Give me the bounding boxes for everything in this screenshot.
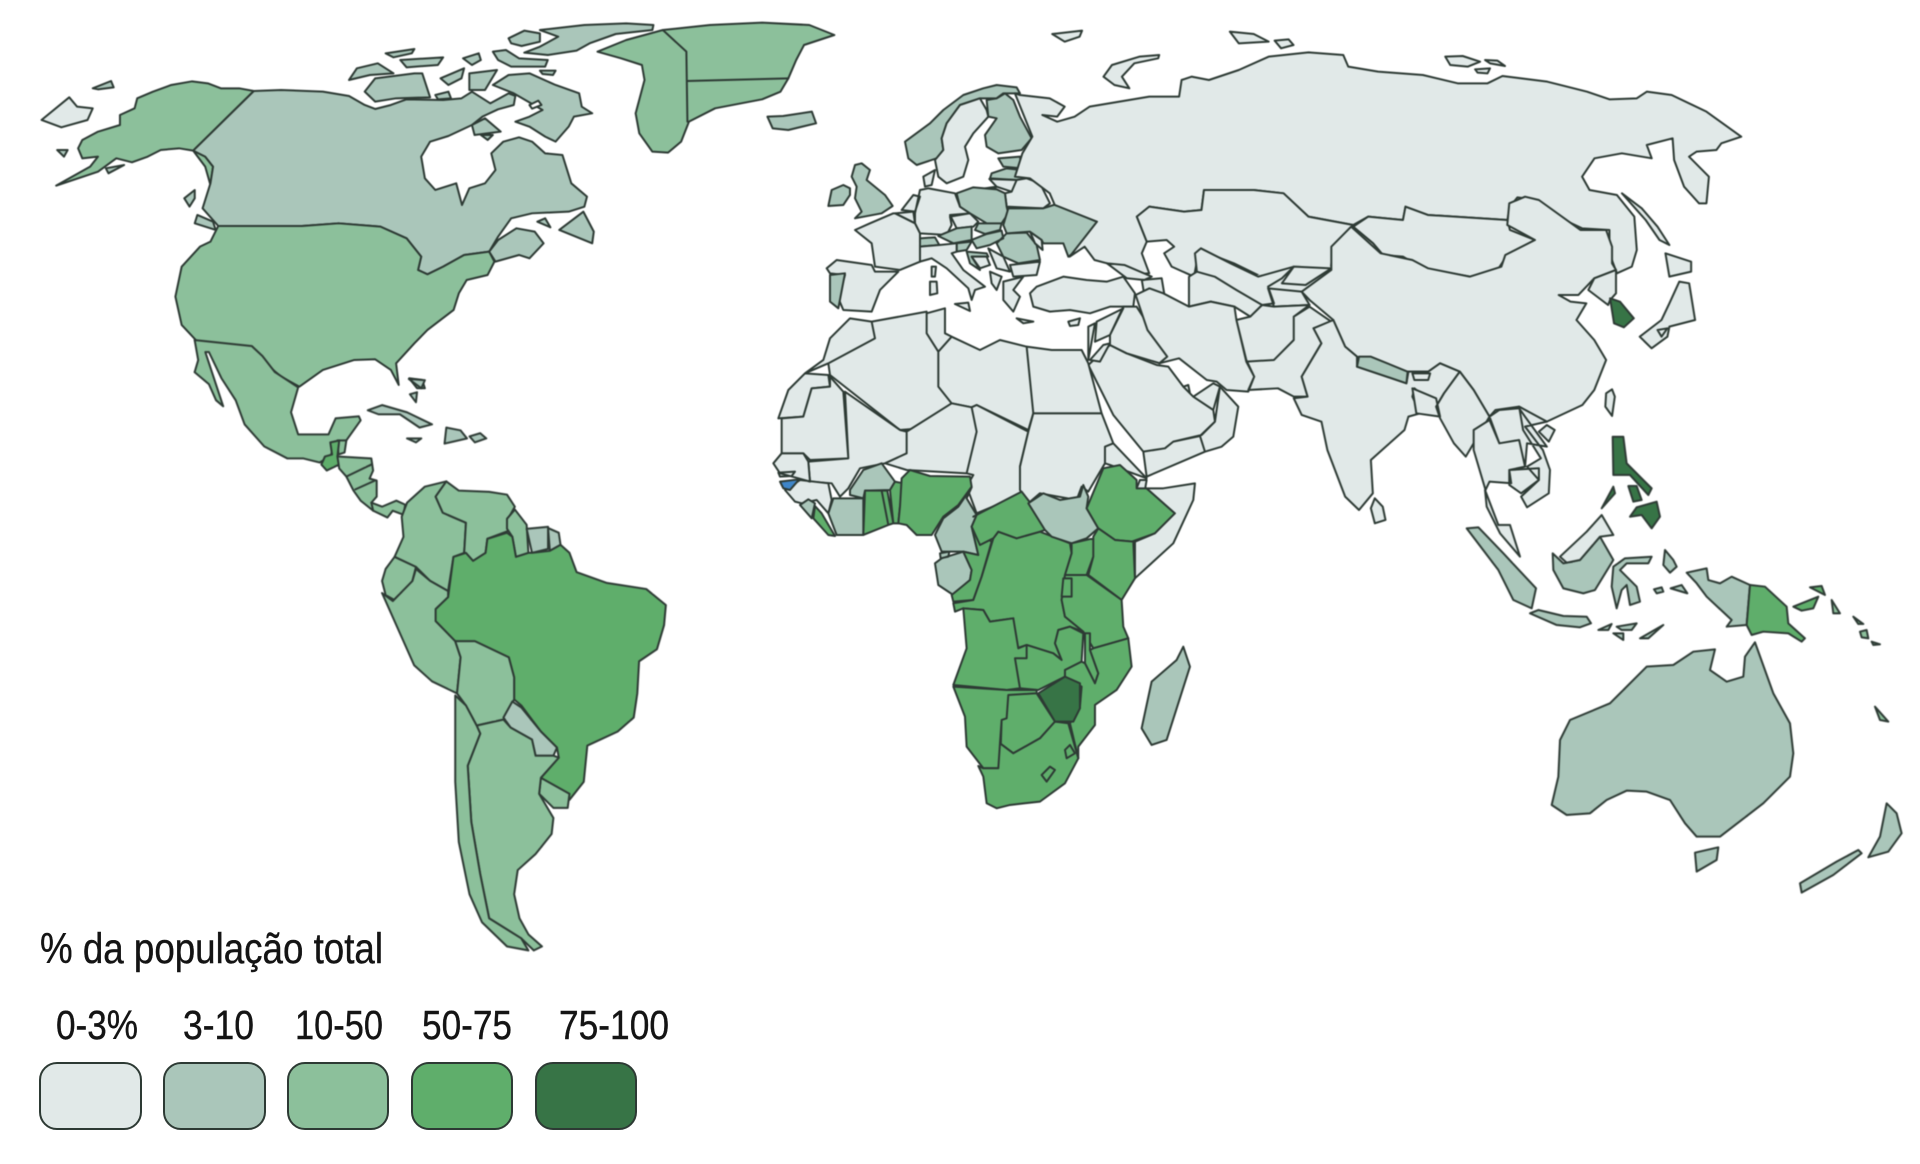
legend title: % da população total bbox=[40, 925, 383, 973]
South and East Asia bbox=[1136, 193, 1695, 523]
Nigeria bbox=[898, 470, 972, 535]
Europe bbox=[827, 85, 1135, 326]
legend item: 75-100 bbox=[536, 1002, 669, 1129]
United States bbox=[175, 223, 494, 387]
Guinea-Bissau bbox=[780, 479, 799, 490]
Mongolia bbox=[1353, 207, 1535, 277]
legend item: 10-50 bbox=[288, 1002, 388, 1129]
legend bbox=[40, 925, 669, 1129]
Kazakhstan bbox=[1137, 190, 1353, 277]
Central and South America bbox=[195, 340, 666, 950]
Brazil bbox=[436, 533, 666, 800]
Australia bbox=[1552, 642, 1793, 837]
Zimbabwe bbox=[1038, 677, 1080, 722]
legend item: 3-10 bbox=[164, 1002, 265, 1129]
Madagascar bbox=[1142, 647, 1190, 745]
North America and Greenland bbox=[42, 23, 834, 388]
Nepal bbox=[1357, 357, 1408, 383]
South Korea bbox=[1610, 298, 1634, 327]
legend item: 75-100: 75-100 bbox=[559, 1002, 669, 1048]
world map bbox=[42, 23, 1902, 950]
legend item: 50-75 bbox=[412, 1002, 512, 1129]
legend item: 0-3%: 0-3% bbox=[56, 1002, 138, 1048]
legend item: 3-10: 3-10 bbox=[183, 1002, 254, 1048]
Russia and northern Asia bbox=[1015, 31, 1741, 295]
India bbox=[1294, 320, 1460, 510]
Japan bbox=[1622, 193, 1695, 348]
Sub-Saharan Africa bbox=[800, 463, 1195, 808]
legend item: 10-50: 10-50 bbox=[295, 1002, 383, 1048]
legend item: 0-3% bbox=[40, 1002, 141, 1129]
South Africa bbox=[978, 722, 1078, 808]
Greenland bbox=[597, 23, 834, 153]
DR Congo bbox=[953, 532, 1083, 660]
Papua New Guinea bbox=[1747, 585, 1825, 642]
Ukraine bbox=[1003, 204, 1097, 257]
Philippines bbox=[1602, 437, 1660, 528]
North Africa and Middle East bbox=[773, 307, 1238, 513]
Ethiopia bbox=[1087, 465, 1175, 542]
Southeast Asia and Oceania bbox=[1467, 437, 1902, 893]
China bbox=[1302, 197, 1616, 422]
legend item: 50-75: 50-75 bbox=[422, 1002, 512, 1048]
